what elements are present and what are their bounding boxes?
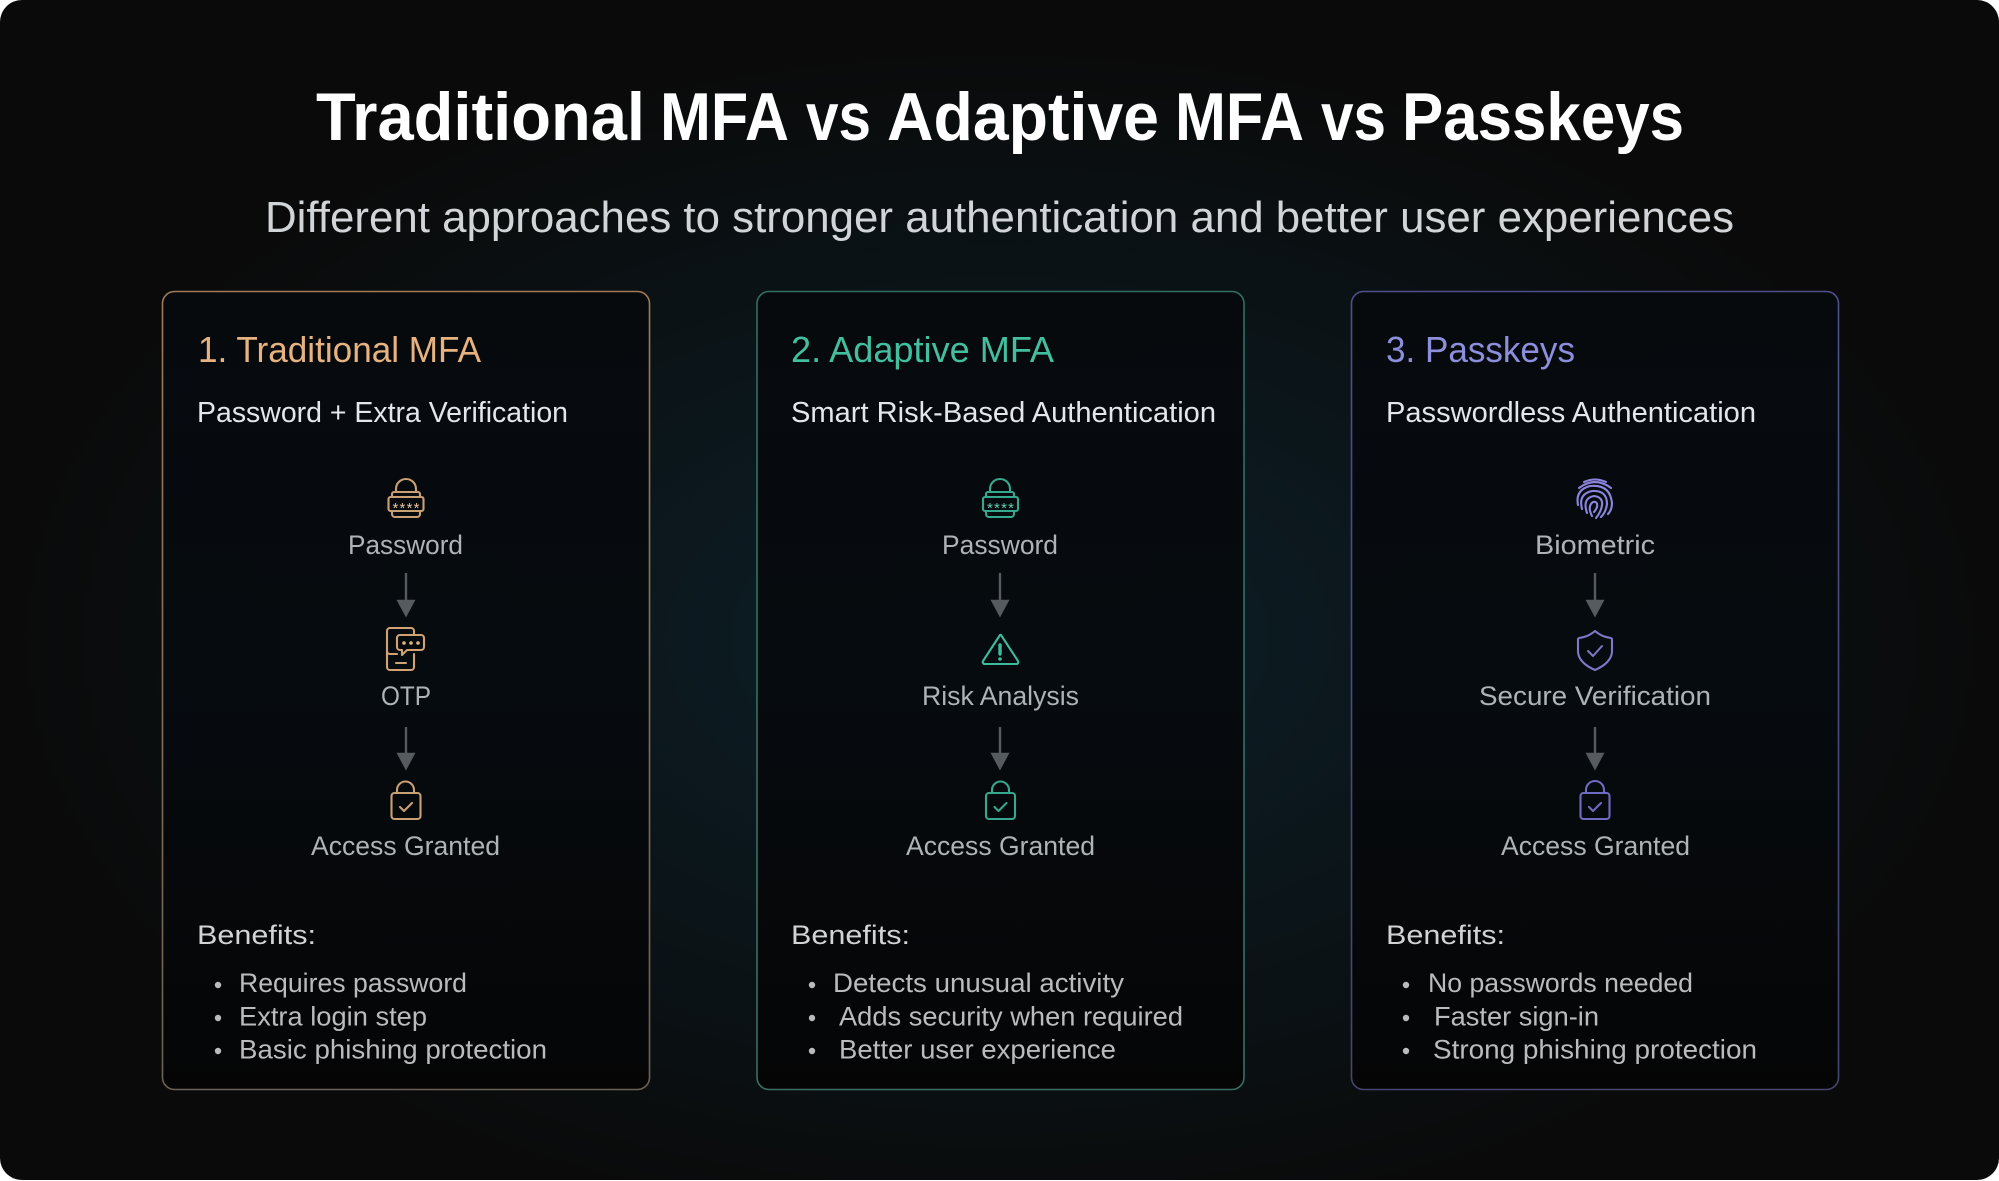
icon: password lock [388, 479, 424, 517]
label: Biometric: Biometric [1535, 530, 1655, 560]
heading: Passkeys: 3. Passkeys [1386, 329, 1575, 370]
label: OTP: OTP [381, 681, 431, 711]
icon: password lock [983, 479, 1018, 517]
label: Password: Password [942, 530, 1058, 560]
label: Secure Verification: Secure Verification [1479, 681, 1711, 711]
benefits list: No passwords needed [1428, 968, 1693, 998]
arrow [398, 727, 414, 768]
label: Password: Password [348, 530, 463, 560]
arrow [1588, 573, 1602, 615]
panel: Passkeys [1352, 292, 1838, 1090]
icon: risk warning triangle [983, 635, 1018, 664]
subheading: Passwordless Authentication [1386, 397, 1756, 429]
benefits heading: Benefits: [197, 920, 316, 950]
icon: password lock: **** [392, 500, 420, 517]
subtitle: Different approaches to stronger authentication and better user experiences [265, 193, 1734, 242]
icon: access lock [986, 782, 1015, 819]
icon: access lock [1580, 781, 1610, 819]
benefits list: Detects unusual activity [833, 968, 1125, 998]
icon: access lock [392, 782, 420, 819]
benefits heading: Benefits: [791, 920, 910, 950]
icon: OTP phone with message [387, 628, 424, 670]
benefits list: Adds security when required [839, 1002, 1183, 1032]
benefits list [1403, 968, 1757, 1064]
arrow [992, 727, 1008, 768]
title: vs [806, 79, 871, 155]
benefits list [215, 968, 547, 1064]
arrow [1588, 727, 1602, 768]
title [316, 79, 1684, 155]
panel: Adaptive MFA [757, 292, 1244, 1090]
benefits list: Strong phishing protection [1433, 1034, 1757, 1064]
arrow [398, 573, 414, 615]
title: Passkeys [1402, 79, 1684, 155]
label: Risk Analysis: Risk Analysis [922, 681, 1079, 711]
panel: Traditional MFA [162, 292, 650, 1090]
benefits list: Faster sign-in [1434, 1002, 1599, 1032]
title: MFA [1175, 79, 1304, 155]
title: Traditional [316, 79, 645, 155]
benefits list: Requires password [239, 968, 467, 998]
arrow [992, 573, 1008, 615]
label: Access Granted: Access Granted [1501, 831, 1690, 861]
label: Access Granted: Access Granted [311, 831, 500, 861]
title: MFA [660, 79, 789, 155]
heading: Adaptive MFA: 2. Adaptive MFA [791, 329, 1054, 370]
icon: fingerprint [1578, 480, 1612, 518]
title: Adaptive [887, 79, 1159, 155]
title: vs [1321, 79, 1386, 155]
label: Access Granted: Access Granted [906, 831, 1095, 861]
benefits list: Better user experience [839, 1034, 1116, 1064]
subheading: Password + Extra Verification [197, 397, 568, 429]
benefits list: Basic phishing protection [239, 1034, 547, 1064]
icon: password lock: **** [987, 500, 1014, 517]
benefits list [809, 968, 1183, 1064]
benefits list: Extra login step [239, 1002, 427, 1032]
subheading: Smart Risk-Based Authentication [791, 397, 1216, 429]
benefits heading: Benefits: [1386, 920, 1505, 950]
heading: Traditional MFA: 1. Traditional MFA [198, 329, 481, 370]
icon: shield with check [1578, 631, 1612, 670]
